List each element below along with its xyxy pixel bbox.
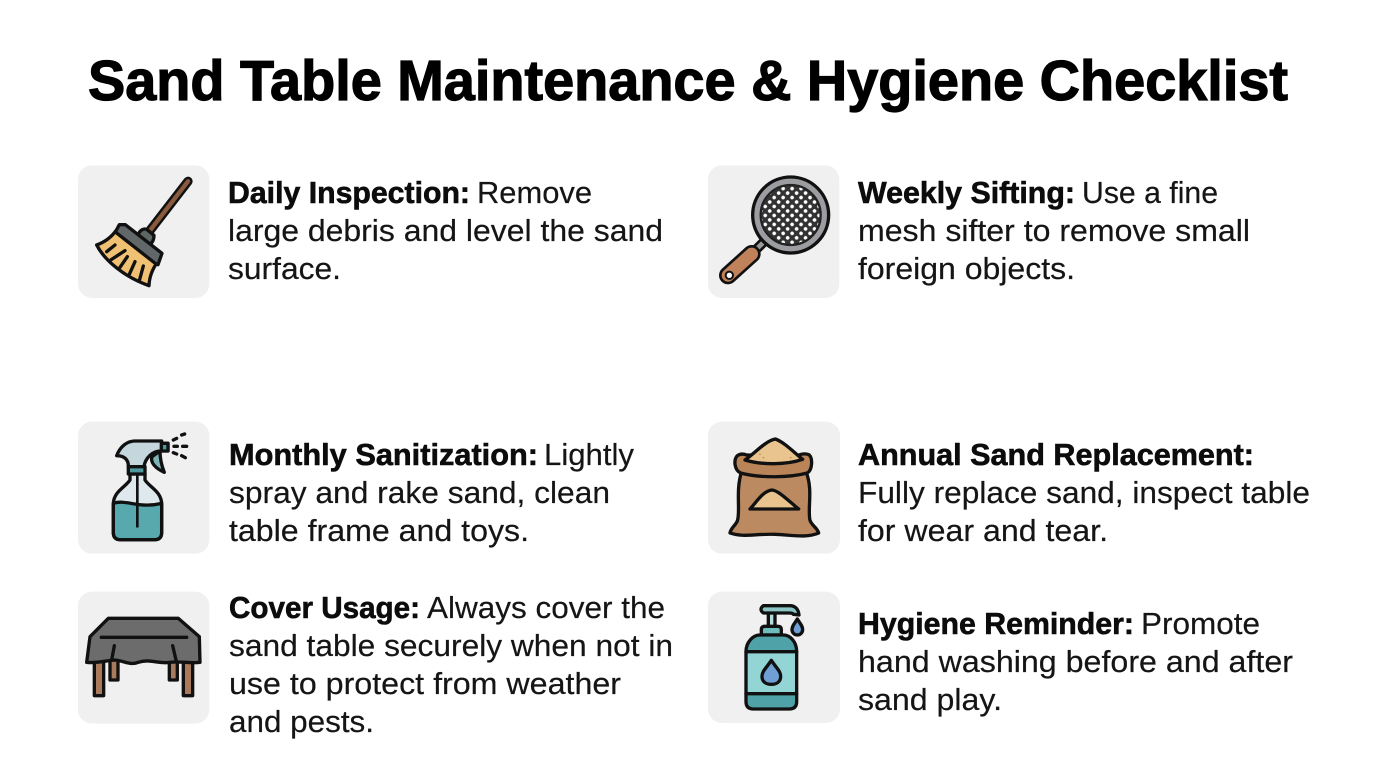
text: weekly sifting: Use a fine — [1082, 175, 1218, 210]
text: daily inspection: Daily Inspection: — [228, 175, 470, 210]
panel: hygiene reminder — [708, 592, 1293, 723]
panel: monthly sanitization — [78, 422, 635, 554]
text: weekly sifting: Weekly Sifting: — [858, 175, 1075, 210]
text: daily inspection: Remove — [477, 175, 592, 210]
icon: soap pump — [708, 592, 840, 723]
text: cover usage: Cover Usage: — [229, 590, 420, 625]
icon: sand sack — [708, 422, 840, 554]
text: cover usage: and pests. — [229, 704, 374, 739]
text: weekly sifting: mesh sifter to remove small — [858, 213, 1250, 248]
text: cover usage — [229, 590, 673, 739]
icon: broom — [78, 165, 209, 298]
panel: daily inspection — [78, 165, 663, 298]
text: daily inspection — [228, 175, 663, 286]
icon: spray bottle — [78, 422, 209, 554]
text: daily inspection: large debris and level the sand — [228, 213, 663, 248]
text: monthly sanitization: table frame and toys. — [229, 513, 529, 548]
text: cover usage: sand table securely when not in — [229, 628, 673, 663]
panel: weekly sifting — [708, 165, 1250, 298]
text: hygiene reminder: Hygiene Reminder: — [858, 606, 1134, 641]
text: annual sand replacement: Fully replace sand, inspect table — [858, 475, 1310, 510]
text: hygiene reminder: Promote — [1141, 606, 1260, 641]
text: annual sand replacement: for wear and tear. — [858, 513, 1108, 548]
text: cover usage: use to protect from weather — [229, 666, 621, 701]
text: annual sand replacement — [858, 437, 1310, 548]
icon: covered table — [78, 592, 209, 724]
text: annual sand replacement: Annual Sand Replacement: — [858, 437, 1254, 472]
text: weekly sifting — [858, 175, 1250, 286]
panel: cover usage — [78, 590, 673, 739]
text: hygiene reminder: hand washing before and after — [858, 644, 1293, 679]
icon: mesh sifter — [708, 165, 839, 298]
text: monthly sanitization: Monthly Sanitization: — [229, 437, 538, 472]
text: monthly sanitization: spray and rake sand, clean — [229, 475, 610, 510]
panel: annual sand replacement — [708, 422, 1310, 554]
text: cover usage: Always cover the — [427, 590, 665, 625]
text: hygiene reminder — [858, 606, 1293, 717]
text: weekly sifting: foreign objects. — [858, 251, 1075, 286]
text: hygiene reminder: sand play. — [858, 682, 1002, 717]
text: daily inspection: surface. — [228, 251, 341, 286]
text: monthly sanitization: Lightly — [544, 437, 635, 472]
title: Sand Table Maintenance & Hygiene Checklist — [88, 49, 1288, 113]
text: monthly sanitization — [229, 437, 635, 548]
